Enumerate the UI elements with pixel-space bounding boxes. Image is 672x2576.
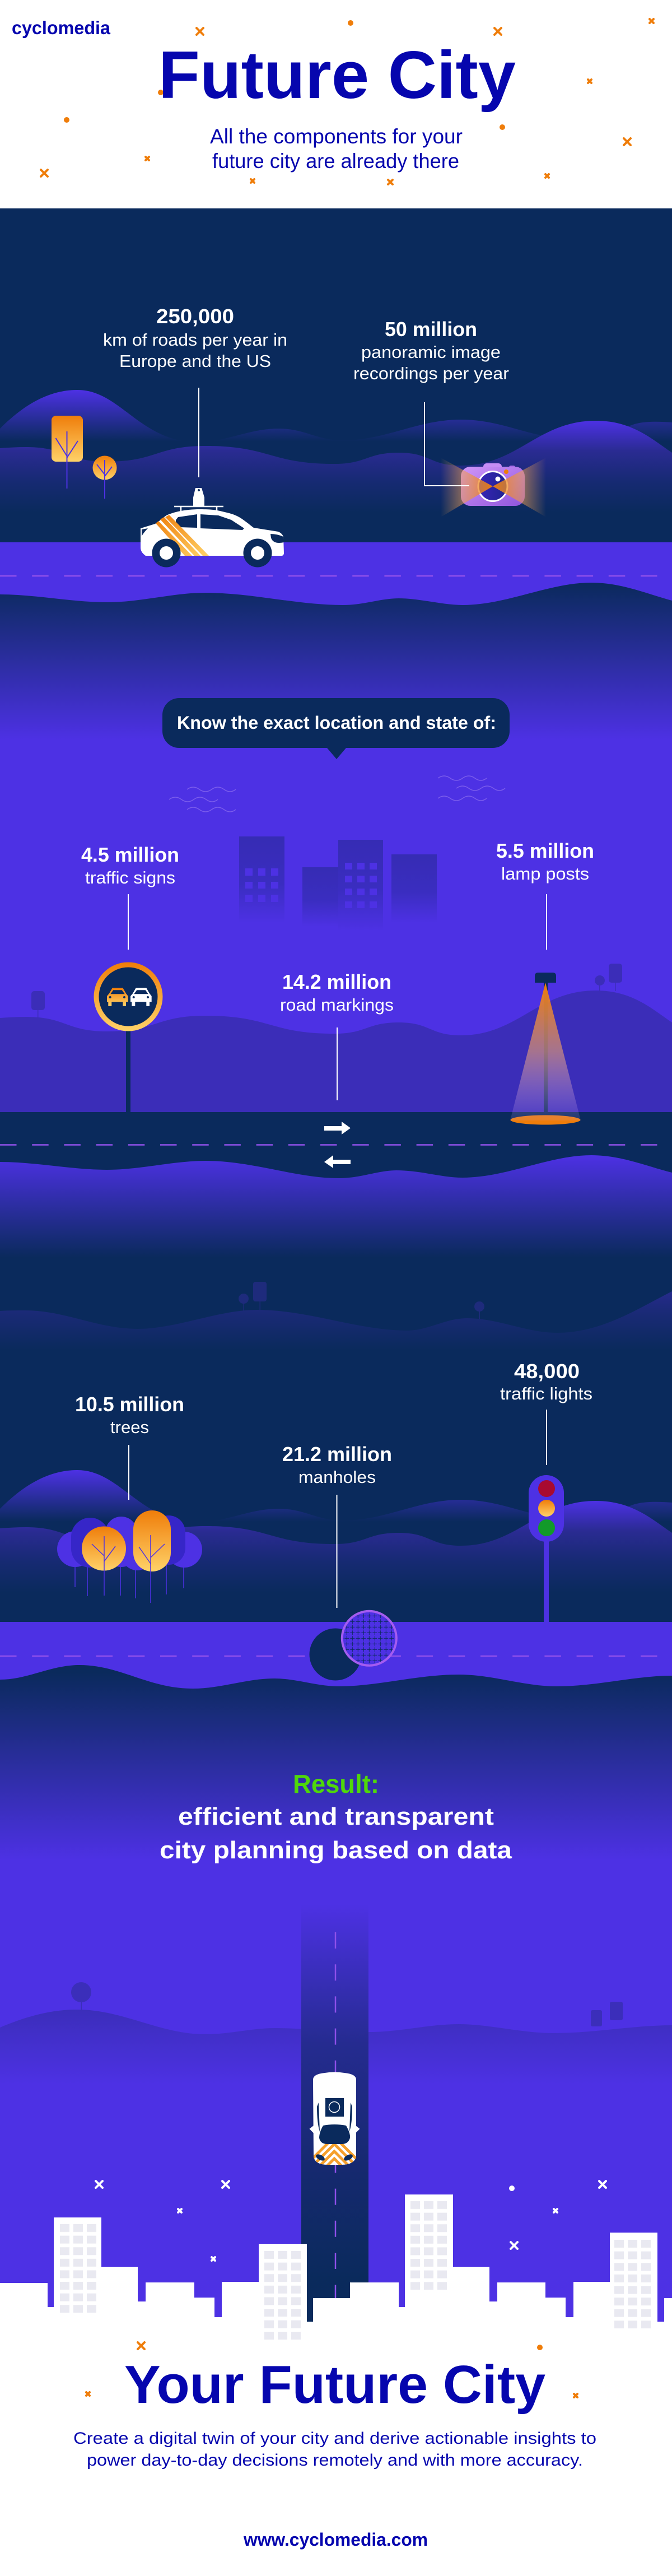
hills section 4 [0, 2010, 672, 2090]
stat: 21.2 million manholes: manholes [298, 1467, 376, 1487]
hills: back layer section 3 [0, 1470, 672, 1622]
speech bubble: Know the exact location and state of: [177, 713, 496, 733]
hills: front layer section 1 [0, 421, 672, 542]
icon: camera [441, 458, 546, 517]
subtitle [210, 125, 463, 173]
result heading: city planning based on data [160, 1836, 512, 1864]
footer text: power day-to-day decisions remotely and with more accuracy. [87, 2451, 583, 2470]
background: white header [0, 0, 672, 208]
stat: 250,000 km of roads: km of roads per year in [103, 330, 287, 350]
skyline tower windows [60, 2201, 651, 2340]
icon: recording car side view [141, 488, 284, 567]
background: purple section with first road [0, 542, 672, 1112]
stat: 48,000 traffic lights: 48,000 [514, 1360, 580, 1383]
icon: arrow left [324, 1155, 351, 1168]
stat: 250,000 km of roads: 250,000 [156, 305, 234, 328]
footer text: Create a digital twin of your city and derive actionable insights to [73, 2429, 596, 2448]
stat: 50 million recordings [353, 318, 509, 383]
leader line to road markings [337, 1027, 338, 1100]
stat: 4.5 million traffic signs: traffic signs [85, 868, 175, 887]
icon: round orange tree [93, 456, 116, 499]
stat: 250,000 km of roads: Europe and the US [119, 351, 271, 371]
logo: cyclomedia [12, 17, 111, 38]
icon: street lamp [510, 973, 581, 1125]
road 2 dashes [0, 1144, 672, 1146]
icon: manhole [309, 1611, 396, 1681]
icon: traffic light [529, 1475, 564, 1623]
title: Future City [158, 38, 516, 113]
background: navy sky panel [0, 208, 672, 542]
stat: 50 million recordings: panoramic image [361, 342, 501, 362]
stat: 14.2 million road markings: road markings [280, 995, 394, 1015]
background: navy section with second road [0, 1112, 672, 1622]
wave transition below road 3 [0, 1665, 672, 1863]
leader line to car [198, 388, 199, 477]
icon: rectangular orange tree [52, 416, 83, 489]
distant trees section 3 [239, 1282, 484, 1319]
stat: 50 million recordings: recordings per year [353, 364, 509, 383]
stat: 50 million recordings: 50 million [385, 318, 477, 341]
stat: 5.5 million lamp posts [496, 839, 594, 884]
stat: 10.5 million trees [75, 1393, 184, 1437]
footer confetti [86, 2342, 577, 2397]
result heading [160, 1769, 512, 1864]
stat: 21.2 million manholes: 21.2 million [282, 1443, 392, 1466]
stat: 4.5 million traffic signs: 4.5 million [81, 843, 179, 866]
wave transition below road 1 [0, 583, 672, 742]
road 1 dashes [0, 575, 672, 576]
website url: www.cyclomedia.com [243, 2529, 428, 2550]
icon: tree cluster [57, 1510, 202, 1603]
leader line to camera [424, 402, 469, 486]
vertical road [301, 1904, 368, 2324]
hills: front layer section 3 [0, 1501, 672, 1622]
stat: 21.2 million manholes [282, 1443, 392, 1487]
icon: traffic sign [94, 962, 162, 1113]
white stars over city [96, 2181, 606, 2261]
hills section 2 [0, 991, 672, 1112]
stat: 48,000 traffic lights: traffic lights [500, 1384, 592, 1403]
result heading: efficient and transparent [178, 1803, 494, 1830]
leader line to traffic light [546, 1410, 547, 1465]
result heading: Result: [293, 1769, 379, 1798]
stat: 5.5 million lamp posts: 5.5 million [496, 839, 594, 862]
clouds left [169, 787, 236, 812]
stat: 5.5 million lamp posts: lamp posts [501, 864, 589, 884]
background: purple section with third road [0, 1622, 672, 2356]
road 3 dashes [0, 1656, 672, 1657]
vertical road dashes [335, 1932, 336, 2300]
footer title: Your Future City [124, 2355, 545, 2415]
city silhouette [239, 836, 437, 931]
stat: 14.2 million road markings: 14.2 million [282, 970, 391, 993]
subtitle: All the components for your [210, 125, 463, 148]
white skyline [0, 2194, 672, 2576]
wave transition below road 2 [0, 1155, 672, 1261]
icon: recording car top view [309, 2072, 360, 2165]
footer text [73, 2429, 596, 2470]
leader line to manhole [336, 1495, 337, 1608]
stat: 250,000 km of roads [103, 305, 287, 371]
distant trees section 2 [31, 964, 622, 1020]
subtitle: future city are already there [212, 150, 459, 173]
leader line to trees [128, 1445, 129, 1500]
header confetti [41, 19, 654, 184]
leader line to lamp [546, 894, 547, 950]
leader line to sign [128, 894, 129, 950]
hills top section 3 [0, 1291, 672, 1389]
icon: arrow right [324, 1122, 351, 1134]
stat: 10.5 million trees: trees [110, 1417, 149, 1437]
stat: 48,000 traffic lights [500, 1360, 592, 1403]
clouds right [438, 776, 505, 801]
stat: 10.5 million trees: 10.5 million [75, 1393, 184, 1416]
hills: back layer section 1 [0, 390, 672, 542]
distant trees section 4 [71, 1982, 623, 2026]
stat: 4.5 million traffic signs [81, 843, 179, 887]
speech bubble [162, 698, 510, 759]
stat: 14.2 million road markings [280, 970, 394, 1015]
